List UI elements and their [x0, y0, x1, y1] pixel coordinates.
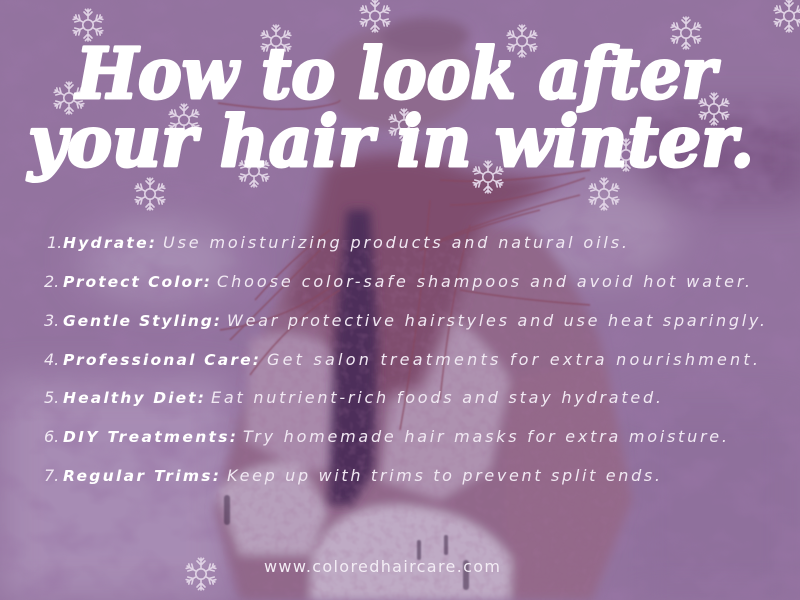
- coat: [215, 220, 632, 600]
- tip 4: Professional Care: Professional Care:: [63, 351, 259, 369]
- hair: [285, 154, 560, 400]
- tip 4: Professional Care: Get salon treatments for extra nourishment.: [267, 350, 758, 369]
- tip 7: Regular Trims: 7.: [44, 466, 59, 485]
- tip 3: Gentle Styling: 3.: [44, 311, 59, 330]
- tip 4: Professional Care: 4.: [44, 350, 59, 369]
- tip 2: Protect Color: Protect Color:: [63, 273, 210, 291]
- left cuff: [217, 463, 328, 555]
- tip 6: DIY Treatments: DIY Treatments:: [63, 428, 236, 446]
- tips list: [44, 233, 765, 485]
- dark scarf: [328, 210, 378, 505]
- tip 5: Healthy Diet: 5.: [44, 388, 59, 407]
- tip 1: Hydrate: Hydrate:: [63, 234, 155, 252]
- tip 2: Protect Color: 2.: [44, 272, 59, 291]
- tip 3: Gentle Styling: Gentle Styling:: [63, 312, 220, 330]
- website footer: www.coloredhaircare.com: [264, 557, 500, 576]
- tip 6: DIY Treatments: 6.: [44, 427, 59, 446]
- tip 4: Professional Care: [44, 350, 758, 369]
- title: [26, 32, 754, 183]
- title: How to look after: [74, 32, 721, 115]
- tip 7: Regular Trims: Regular Trims:: [63, 467, 219, 485]
- title: your hair in winter.: [26, 100, 754, 183]
- tip 1: Hydrate: Use moisturizing products and natural oils.: [163, 233, 627, 252]
- fur lapels: [245, 333, 350, 470]
- tip 1: Hydrate: 1.: [47, 233, 62, 252]
- tip 6: DIY Treatments: Try homemade hair masks for extra moisture.: [243, 427, 727, 446]
- right sleeve: [505, 360, 632, 600]
- tip 3: Gentle Styling: Wear protective hairstyles and use heat sparingly.: [227, 311, 765, 330]
- tip 5: Healthy Diet: Healthy Diet:: [63, 389, 204, 407]
- tip 7: Regular Trims: Keep up with trims to prevent split ends.: [227, 466, 660, 485]
- hood: [322, 26, 474, 130]
- tip 5: Healthy Diet: Eat nutrient-rich foods and stay hydrated.: [211, 388, 661, 407]
- right mitten: [310, 505, 512, 600]
- tip 2: Protect Color: Choose color-safe shampoos and avoid hot water.: [217, 272, 750, 291]
